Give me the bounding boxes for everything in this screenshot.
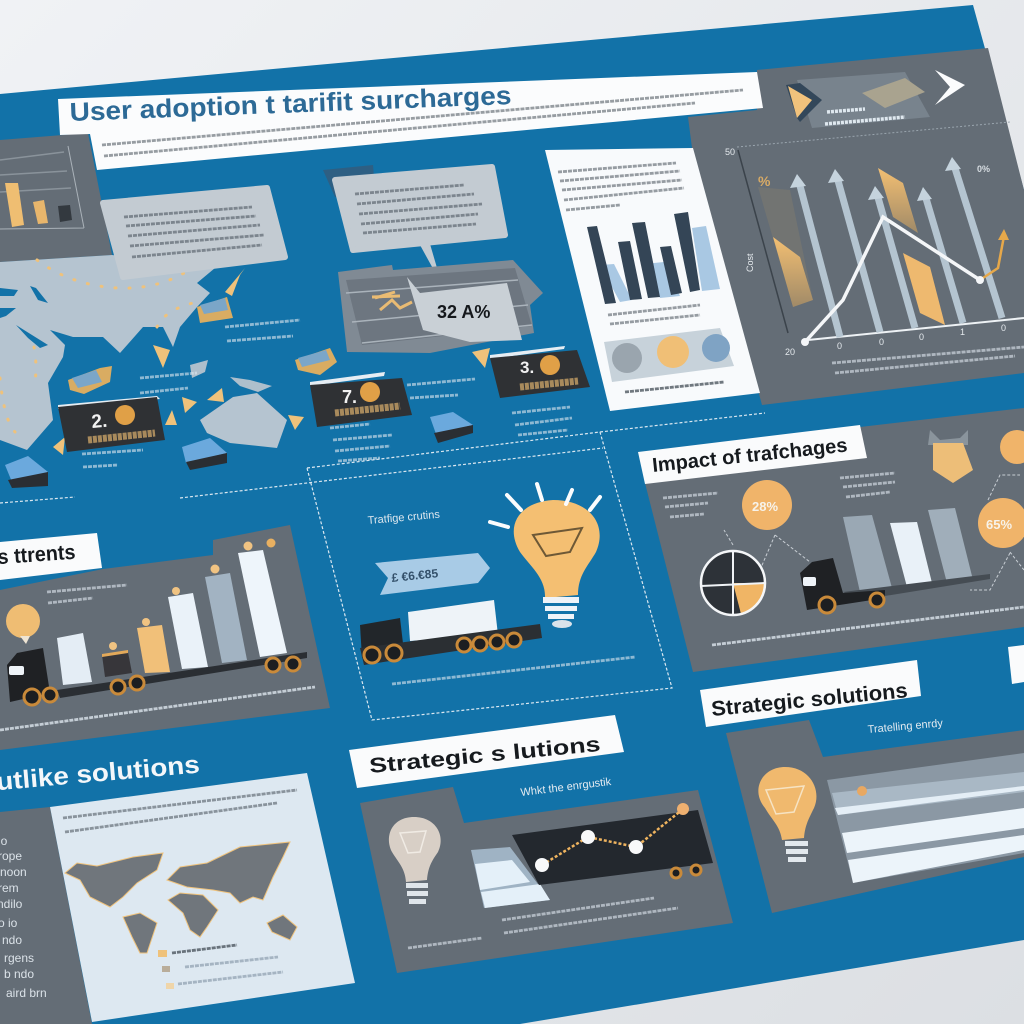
arrows — [790, 157, 1002, 337]
axis ticks: 20 — [785, 347, 795, 357]
caption — [408, 898, 678, 948]
bulb — [758, 767, 816, 862]
icon: truck mid — [182, 438, 227, 470]
panel: middle callout — [310, 165, 590, 461]
stat badge centre: 7. — [342, 387, 357, 407]
icon: truck centre — [430, 412, 473, 443]
process box — [338, 260, 543, 353]
percent tag — [407, 277, 522, 342]
dashed frame — [0, 413, 765, 720]
panel: impact of surcharges — [638, 408, 1024, 672]
coin left — [742, 480, 792, 530]
gold tags: 0% — [977, 164, 990, 174]
gold tag glow card — [758, 187, 813, 307]
coin right — [978, 498, 1024, 548]
coin right: 65% — [986, 517, 1012, 532]
axis ticks: 0 — [837, 341, 842, 351]
heading — [349, 715, 624, 788]
truck impact — [800, 558, 990, 613]
heading: impact — [638, 425, 867, 484]
callout: map — [103, 188, 285, 277]
icon: truck left — [5, 456, 48, 488]
axis ticks: 0 — [1001, 323, 1006, 333]
gold tags: % — [758, 173, 771, 189]
inland seas — [0, 286, 48, 348]
truck with trailer — [360, 600, 542, 665]
icon: light bulb — [490, 484, 600, 628]
tag — [375, 553, 490, 595]
panel: centre truck and bulb — [360, 484, 635, 684]
stripes — [827, 753, 1024, 883]
dashed routes — [0, 260, 193, 432]
panel: cost trends — [0, 525, 330, 750]
map labels — [82, 320, 300, 467]
stat badge left: 2. — [91, 411, 108, 433]
side list: ndo — [2, 933, 22, 947]
heading: trends — [0, 533, 102, 580]
truck dark — [7, 648, 307, 705]
stat text right — [512, 407, 572, 435]
tag: £ €6.€85 — [391, 566, 439, 585]
axis ticks: 1 — [960, 327, 965, 337]
bars — [57, 538, 287, 685]
caption — [392, 657, 635, 684]
percent value: 32 A% — [437, 302, 490, 322]
connector lines — [724, 475, 1024, 590]
top right coin — [1000, 430, 1024, 464]
axis ticks — [725, 147, 1006, 357]
axis ticks: 0 — [919, 332, 924, 342]
trend line — [805, 217, 980, 342]
label: Tratfige crutins — [367, 509, 441, 527]
dark line chart — [512, 803, 713, 885]
stripes — [471, 847, 550, 908]
panel: header banner — [58, 72, 763, 170]
axis ticks: 50 — [725, 147, 735, 157]
stat badge centre — [310, 372, 412, 427]
speech bubble — [335, 167, 505, 285]
heading: utlike solutions — [0, 751, 201, 796]
panel: world map region — [0, 188, 337, 488]
legend — [158, 945, 283, 989]
side list: b ndo — [4, 967, 34, 981]
side list: aird brn — [6, 986, 47, 1000]
side panel — [0, 807, 92, 1024]
panel: outlook solutions list — [0, 751, 355, 1024]
heading — [700, 660, 921, 727]
world map — [65, 842, 297, 953]
panel: report bar chart — [545, 148, 760, 411]
white tab — [1008, 645, 1024, 684]
map landmass australia — [200, 393, 287, 448]
stat badge right — [490, 346, 590, 398]
bulb — [389, 817, 441, 904]
map card — [50, 773, 355, 1022]
axis ticks: Cost — [745, 253, 755, 272]
side list — [0, 834, 47, 1000]
bars — [843, 508, 973, 592]
header arrows — [786, 70, 965, 128]
panel: strategic solutions right — [700, 645, 1024, 913]
panel: small chart top-left — [0, 133, 112, 262]
icon: crates — [53, 268, 337, 455]
axis ticks: 0 — [879, 337, 884, 347]
sub label: Whkt the enrgustik — [520, 776, 612, 799]
subtitle — [102, 90, 743, 156]
sub label: Tratelling enrdy — [867, 717, 944, 736]
gold tags — [758, 164, 990, 325]
pie — [701, 551, 765, 615]
heading: Strategic solutions — [710, 679, 909, 721]
stat badge left — [58, 396, 165, 452]
map islands — [190, 360, 272, 392]
heading: Strategic s lutions — [368, 733, 601, 778]
stat text centre — [330, 379, 475, 461]
panel: arrow line chart — [688, 48, 1024, 405]
pin icon — [6, 604, 40, 644]
stat badge right: 3. — [520, 358, 534, 377]
side list: rgens — [4, 951, 34, 965]
coin left: 28% — [752, 499, 778, 514]
title: User adoption t tarifit surcharges — [69, 80, 512, 127]
axis labels — [832, 347, 1024, 373]
map landmass asia — [0, 255, 215, 450]
panel: strategic solutions centre — [349, 715, 733, 973]
report icons — [604, 328, 734, 382]
heading: impact: Impact of trafchages — [651, 435, 848, 477]
crown badge — [928, 430, 973, 483]
report bars — [587, 212, 720, 304]
